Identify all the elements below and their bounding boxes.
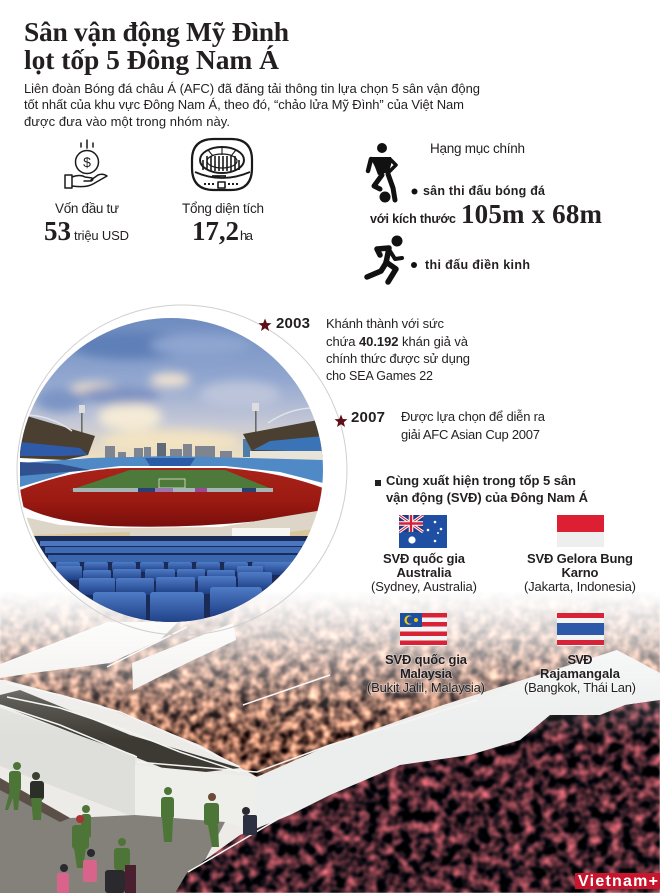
timeline: 2003: cho SEA Games 22 xyxy=(326,369,433,383)
label: Indonesia stadium: SVĐ Gelora Bung xyxy=(527,551,633,566)
icon: stadium xyxy=(192,139,252,190)
timeline: 2007 xyxy=(334,409,546,442)
officers in green xyxy=(5,762,219,870)
dark stairs under railing xyxy=(0,690,240,775)
lower bowl seating xyxy=(20,456,323,487)
label: Australia stadium: Australia xyxy=(396,565,452,580)
white wall strips in upper stands xyxy=(0,622,178,678)
advertising boards xyxy=(73,488,273,492)
category: football pitch: sân thi đấu bóng đá xyxy=(423,184,545,198)
logo: Vietnam+: Vietnam+ xyxy=(578,873,658,890)
timeline: 2003: chứa 40.192 khán giả và xyxy=(326,334,469,349)
photo: My Dinh stadium in circle xyxy=(19,318,323,626)
flag: Thailand xyxy=(557,613,604,646)
label: Malaysia stadium: (Bukit Jalil, Malaysia) xyxy=(367,680,485,695)
label: Thailand stadium: (Bangkok, Thái Lan) xyxy=(524,680,636,695)
label: Australia stadium: SVĐ quốc gia xyxy=(383,551,466,566)
category: football pitch: với kích thước xyxy=(370,212,456,226)
stat: total area: 17,2 xyxy=(192,216,239,246)
floodlights xyxy=(79,403,259,432)
intro paragraph xyxy=(24,81,480,129)
icon: money in hand xyxy=(65,140,107,188)
flag: Indonesia xyxy=(557,515,604,547)
label: Australia stadium xyxy=(371,551,477,594)
photo: stadium crowd background xyxy=(0,590,660,893)
timeline: 2007: Được lựa chọn để diễn ra xyxy=(401,409,546,424)
heading: top five stadiums: Cùng xuất hiện trong tốp 5 sân xyxy=(386,473,576,488)
category: football pitch xyxy=(370,184,602,229)
flag: Malaysia xyxy=(400,613,447,646)
heading: top five stadiums xyxy=(375,473,589,505)
ground xyxy=(0,778,225,893)
stat: total area: ha xyxy=(240,228,254,243)
label: Thailand stadium: Rajamangala xyxy=(540,666,621,681)
skyline xyxy=(105,439,254,458)
heading: top five stadiums: vận động (SVĐ) của Đông Nam Á xyxy=(386,490,589,505)
label: Indonesia stadium: Karno xyxy=(562,565,599,580)
seat rows xyxy=(56,562,304,624)
clouds xyxy=(36,331,280,454)
timeline: 2003: 2003 xyxy=(276,315,310,332)
concrete side wall left xyxy=(0,708,137,818)
title: Sân vận động Mỹ Đình xyxy=(24,16,289,47)
seating area xyxy=(34,536,308,622)
timeline: 2007: giải AFC Asian Cup 2007 xyxy=(401,427,540,442)
label: Thailand stadium xyxy=(524,652,636,695)
stat: investment: Vốn đầu tư xyxy=(55,201,119,216)
timeline: 2003: Khánh thành với sức xyxy=(326,316,444,331)
label: Indonesia stadium xyxy=(524,551,636,594)
pitch xyxy=(70,470,272,490)
intro paragraph: tốt nhất của khu vực Đông Nam Á, theo đó, “chảo lửa Mỹ Đình” của Việt Nam xyxy=(24,97,464,112)
concrete edge xyxy=(26,510,318,536)
timeline: 2007: 2007 xyxy=(351,409,385,426)
people in pink vests xyxy=(57,860,97,893)
timeline: 2003: chính thức được sử dụng xyxy=(326,351,470,366)
intro paragraph: Liên đoàn Bóng đá châu Á (AFC) đã đăng tải thông tin lựa chọn 5 sân vận động xyxy=(24,81,480,96)
timeline: 2003 xyxy=(258,315,470,383)
stat: investment: 53 xyxy=(44,216,71,246)
label: Malaysia stadium: SVĐ quốc gia xyxy=(385,652,468,667)
heading: main categories: Hạng mục chính xyxy=(430,141,525,156)
label: Thailand stadium: SVĐ xyxy=(568,652,592,667)
lower crowd in red xyxy=(175,700,660,893)
icon: football player xyxy=(368,143,396,202)
railings xyxy=(0,622,477,872)
stat: investment: triệu USD xyxy=(74,228,129,243)
icon: money in hand: $ xyxy=(83,154,91,170)
category: athletics: thi đấu điền kinh xyxy=(425,258,530,272)
title xyxy=(24,16,289,75)
intro paragraph: được đưa vào một trong nhóm này. xyxy=(24,114,230,129)
label: Australia stadium: (Sydney, Australia) xyxy=(371,579,477,594)
left stand xyxy=(20,414,95,460)
stat: investment xyxy=(44,201,129,246)
white concourse wall right xyxy=(257,650,660,830)
stat: total area xyxy=(182,201,264,246)
running track xyxy=(20,468,323,527)
upper crowd in orange xyxy=(0,590,660,777)
label: Malaysia stadium: Malaysia xyxy=(400,666,453,681)
label: Indonesia stadium: (Jakarta, Indonesia) xyxy=(524,579,636,594)
icon: runner xyxy=(367,236,402,282)
category: football pitch: 105m x 68m xyxy=(461,199,602,229)
ring: thin circle around photo xyxy=(17,305,347,635)
title: lọt tốp 5 Đông Nam Á xyxy=(24,44,279,75)
label: Malaysia stadium xyxy=(367,652,485,695)
stat: total area: Tổng diện tích xyxy=(182,201,264,216)
fade: white gradient over crowd photo xyxy=(0,570,660,740)
flag: Australia xyxy=(399,515,447,548)
right stand xyxy=(243,420,323,460)
